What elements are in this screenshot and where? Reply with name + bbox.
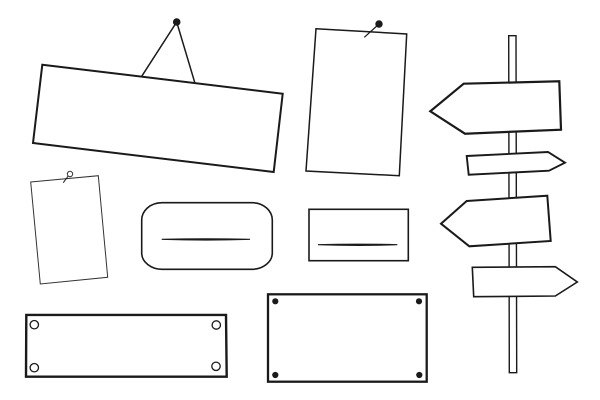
rounded sign with line xyxy=(142,203,272,269)
arrow: small right xyxy=(467,152,565,175)
nail xyxy=(173,18,180,26)
board xyxy=(26,315,227,377)
board xyxy=(31,176,108,284)
rectangular sign with line xyxy=(309,209,408,261)
signpost xyxy=(430,36,577,373)
screws xyxy=(272,298,422,378)
plate with open screw holes xyxy=(26,315,227,377)
board xyxy=(142,203,272,269)
centre line xyxy=(162,239,250,240)
small pinned sign xyxy=(31,171,108,284)
screw holes xyxy=(30,320,220,372)
board xyxy=(268,294,427,382)
hanging sign with nail xyxy=(33,18,283,172)
board xyxy=(306,29,407,176)
arrow: large left xyxy=(430,81,561,134)
board xyxy=(309,209,408,261)
pinned portrait sign xyxy=(306,20,407,176)
open pin xyxy=(63,171,73,183)
sign board xyxy=(33,65,283,172)
black pin xyxy=(364,20,383,37)
hanging strings xyxy=(142,22,195,82)
plate with black screws xyxy=(268,294,427,382)
arrow: medium left xyxy=(441,196,551,246)
post xyxy=(509,36,517,373)
centre line xyxy=(318,244,397,245)
arrow: medium right xyxy=(472,267,577,297)
